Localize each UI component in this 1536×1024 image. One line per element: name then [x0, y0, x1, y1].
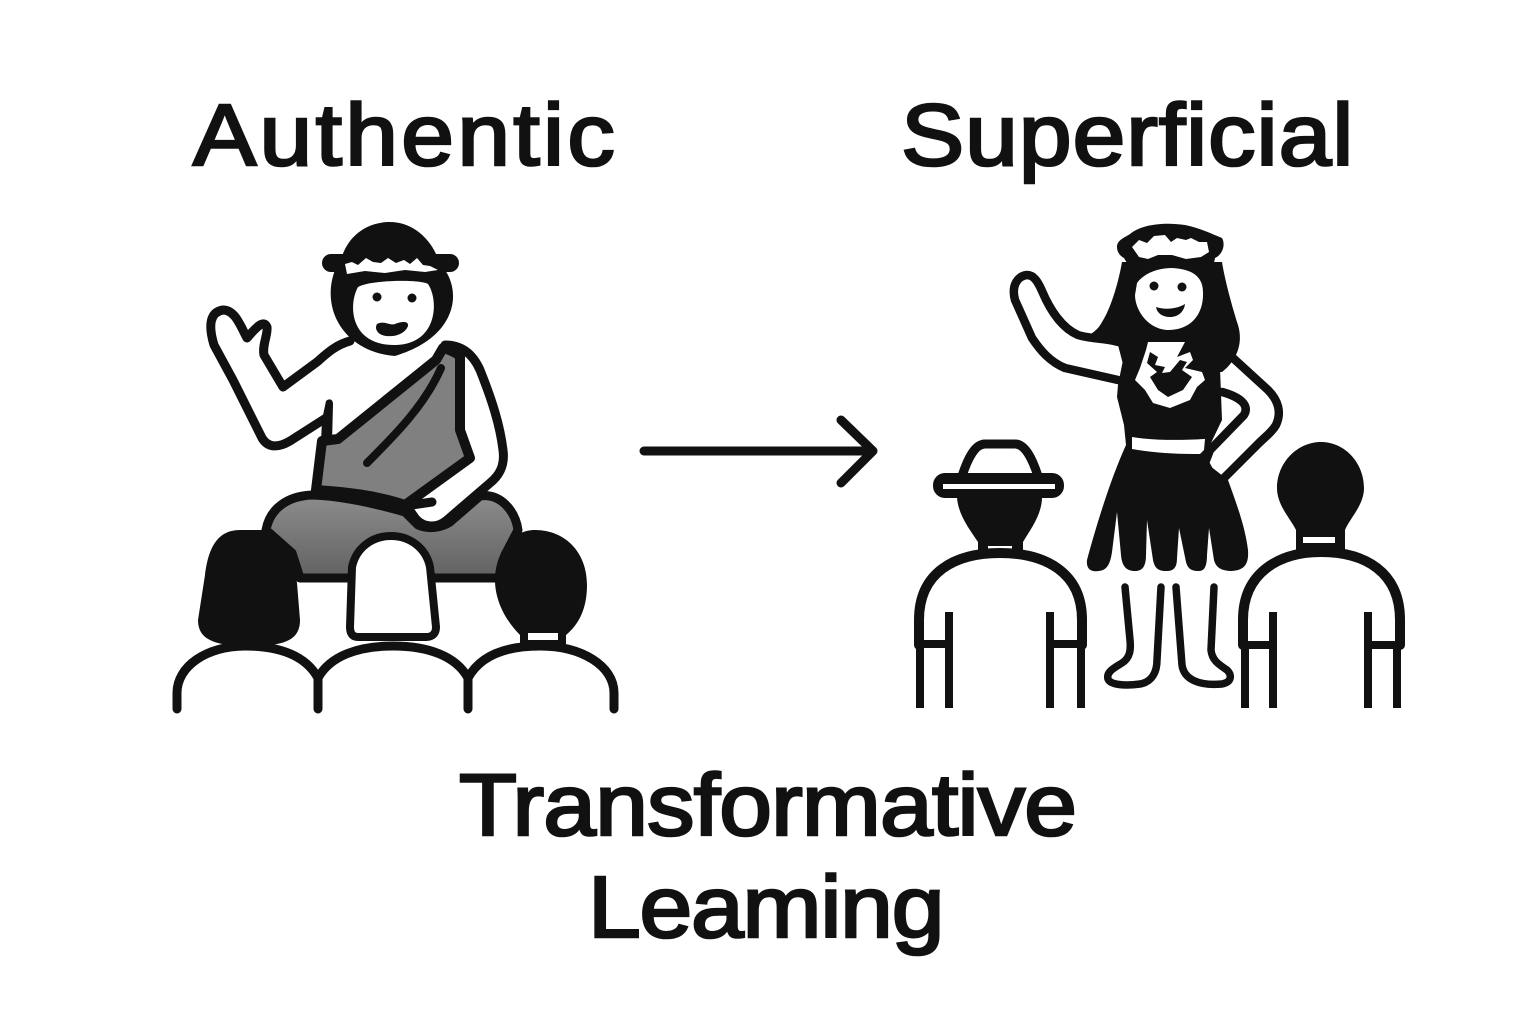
heading: Transformative Leaming: Leaming — [588, 860, 944, 956]
heading: Transformative Leaming — [459, 758, 1077, 956]
heading: Superficial: Superficial — [901, 88, 1353, 184]
teacher waving arm — [211, 310, 350, 446]
performer legs — [1108, 587, 1230, 685]
center audience member — [350, 536, 436, 637]
performer dress — [1087, 350, 1248, 571]
left tourist head — [957, 497, 1042, 555]
performer hair — [1088, 262, 1240, 372]
heading: Authentic: Authentic — [193, 88, 615, 184]
left tourist hat — [933, 444, 1064, 498]
right tourist head — [1277, 442, 1364, 553]
teacher right arm — [408, 345, 503, 526]
right audience head — [495, 530, 587, 645]
performer lei — [1135, 342, 1205, 408]
left tourist body — [915, 553, 1085, 708]
teacher seated legs — [266, 495, 518, 578]
illustration: superficial performer with tourists — [915, 224, 1402, 708]
performer wreath — [1117, 224, 1224, 268]
performer waving arm — [1014, 275, 1118, 380]
audience shoulders — [177, 646, 614, 709]
left audience head — [198, 530, 300, 646]
performer belt — [1132, 437, 1205, 454]
arrow — [644, 420, 873, 483]
heading: Transformative Leaming: Transformative — [459, 758, 1077, 854]
performer hip arm — [1205, 358, 1279, 480]
illustration: authentic teacher with audience — [177, 222, 614, 709]
performer face — [1135, 268, 1203, 330]
teacher head — [331, 222, 453, 356]
right tourist body — [1240, 552, 1402, 708]
teacher torso toga — [316, 348, 470, 505]
